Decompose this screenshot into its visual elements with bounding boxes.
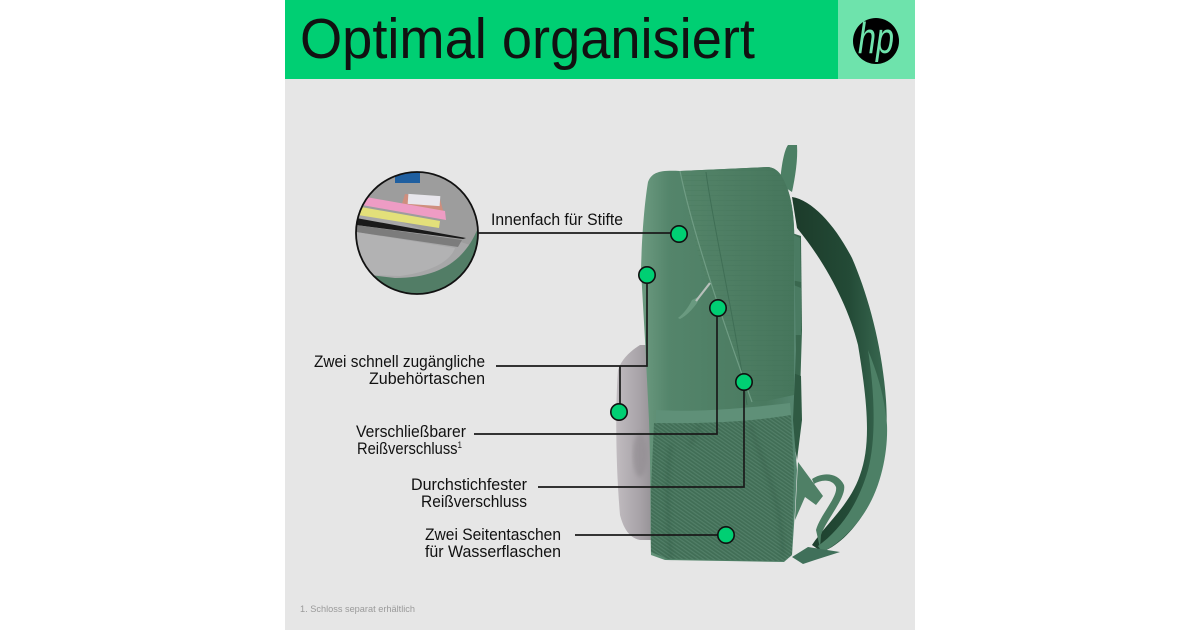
label: accessory pockets: Zwei schnell zugängliche (314, 353, 485, 371)
background panel (285, 0, 915, 630)
label: lockable zipper: Reißverschluss (357, 440, 470, 458)
leader lines (474, 233, 744, 535)
shoulder strap (792, 197, 887, 552)
marker dots (611, 226, 752, 543)
icon: HP logo: hp (858, 14, 894, 63)
main body (641, 167, 797, 562)
zipper pull (678, 283, 710, 319)
header banner (285, 0, 915, 79)
back padding (789, 232, 802, 396)
label: puncture-proof zipper: Durchstichfester (411, 476, 527, 494)
label: lockable zipper: Verschließbarer (356, 423, 466, 441)
flap (680, 167, 794, 403)
title: Optimal organisiert (300, 7, 755, 71)
label: accessory pockets: Zubehörtaschen (369, 370, 485, 388)
label: side pockets: für Wasserflaschen (425, 543, 561, 561)
label: puncture-proof zipper: Reißverschluss (421, 493, 527, 511)
lower strap webbing (792, 462, 844, 564)
backpack illustration (616, 145, 887, 564)
footnote: 1. Schloss separat erhältlich (300, 604, 415, 615)
label: pen compartment: Innenfach für Stifte (491, 211, 623, 229)
mesh pocket band (656, 403, 791, 423)
label: side pockets: Zwei Seitentaschen (425, 526, 561, 544)
label: accessory pockets (314, 353, 485, 388)
mesh side pocket (651, 415, 794, 561)
label: side pockets (425, 526, 561, 561)
top handle (780, 145, 797, 192)
inset: pen compartment (350, 172, 480, 300)
label: lockable zipper (356, 423, 466, 458)
gray pocket (616, 345, 655, 540)
label: lockable zipper: 1 (458, 440, 462, 450)
label: puncture-proof zipper (411, 476, 527, 511)
